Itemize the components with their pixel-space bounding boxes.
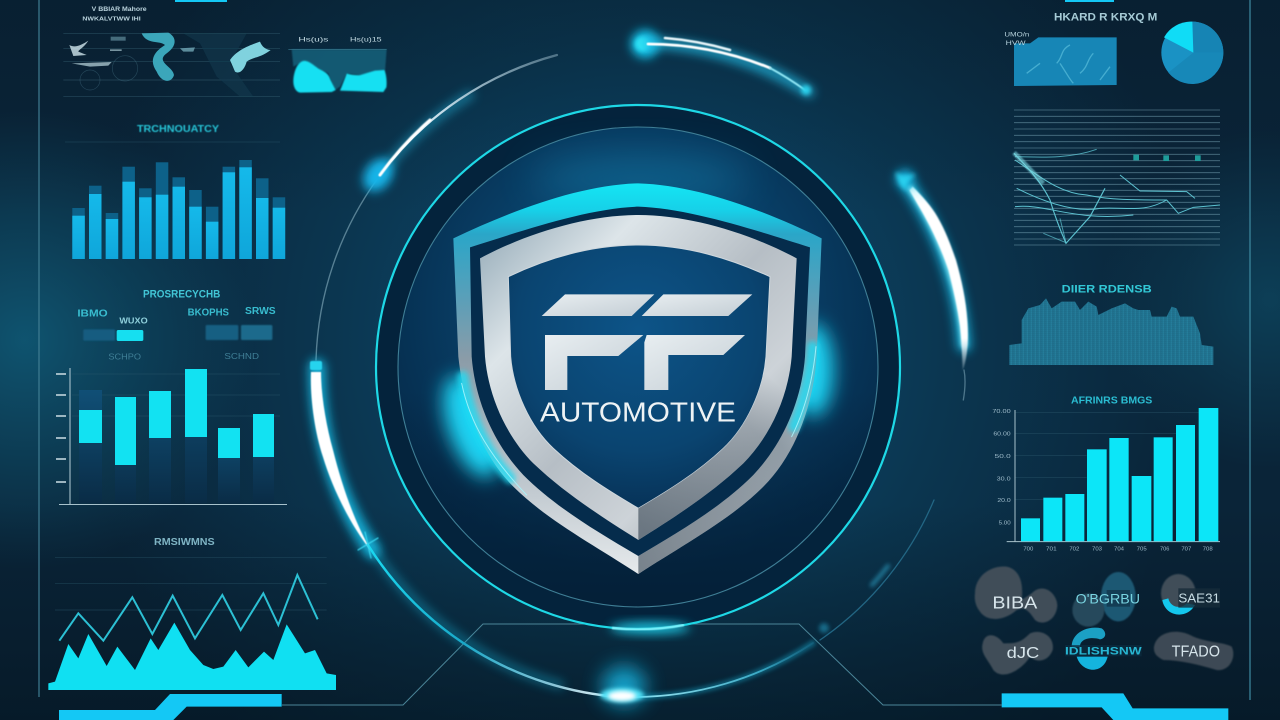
blob: bottom middle	[1065, 628, 1143, 670]
blob: top middle	[1072, 572, 1140, 627]
shield lower right shade	[638, 357, 817, 574]
shield rim light left	[462, 377, 527, 495]
logo: wordmark: AUTOMOTIVE	[540, 397, 736, 428]
heading: DIIER RDENSB	[1062, 283, 1152, 295]
axis labels: 703	[1092, 547, 1102, 553]
cyan ring	[376, 105, 900, 629]
heading: RMSIWMNS	[154, 537, 215, 548]
axis labels: 60.00	[993, 431, 1011, 437]
shield rim light right	[792, 347, 816, 437]
blob: bottom right	[1154, 632, 1233, 670]
panel: bar chart bottom right	[992, 396, 1220, 553]
gauge shapes	[288, 49, 387, 93]
blob: bottom left: dJC	[1007, 645, 1039, 662]
panel: labelled blobs bottom right	[975, 567, 1233, 675]
heading: AFRINRS BMGS	[1071, 396, 1153, 407]
shield groove	[470, 207, 810, 556]
base panel: trapezoid outline	[282, 624, 1002, 705]
labels: IBMO	[77, 309, 108, 320]
blob: top middle: O'BGRBU	[1076, 590, 1140, 606]
accent bar bottom left	[59, 694, 282, 720]
stacked bars	[72, 160, 285, 259]
accent bar bottom right	[1002, 693, 1228, 720]
labels: BKOPHS	[188, 308, 229, 319]
line series	[59, 575, 318, 641]
shield outer band	[453, 183, 822, 574]
top accent bar left	[175, 0, 227, 2]
blob: bottom middle: IDLISHSNW	[1065, 646, 1143, 658]
heading: PROSRECYCHB	[143, 288, 221, 300]
right frame line	[1249, 0, 1251, 700]
axis labels: 704	[1114, 547, 1124, 553]
logo: FF Automotive shield	[431, 183, 833, 574]
gridlines and axis	[1007, 410, 1220, 542]
marker squares	[1133, 155, 1201, 161]
gauge labels: Hs(u)s	[298, 36, 328, 43]
panel: map and header, top left	[63, 6, 280, 97]
left frame line	[38, 0, 40, 697]
icon: right star flare	[895, 170, 916, 191]
arc: right bright	[909, 187, 968, 400]
bright bars	[79, 369, 274, 465]
gauge labels	[298, 36, 382, 43]
labels: WUXO	[119, 315, 148, 325]
axis labels: 20.0	[997, 498, 1011, 504]
axis labels: 706	[1160, 547, 1169, 553]
heading: HKARD R KRXQ M	[1054, 12, 1157, 24]
panel: cyan gauge, top	[288, 36, 387, 93]
blob: top left: BIBA	[992, 592, 1038, 612]
pie chart	[1161, 22, 1223, 84]
world map	[63, 33, 280, 97]
axis labels: 30.0	[997, 476, 1011, 482]
sub labels: SCHND	[224, 351, 259, 361]
glow above shield	[530, 156, 750, 200]
glow on ring bottom	[610, 622, 690, 634]
panel: histogram right	[1009, 283, 1213, 365]
axis labels: 705	[1137, 547, 1147, 553]
axis labels: 701	[1046, 547, 1057, 553]
arc: bottom flare	[600, 666, 646, 706]
orbit ring arcs	[310, 30, 968, 706]
sub labels	[108, 351, 259, 361]
area series	[48, 623, 336, 690]
shield point facet	[638, 357, 792, 540]
axis labels: 702	[1069, 547, 1079, 553]
gridlines	[1014, 110, 1220, 245]
bars	[1021, 408, 1218, 541]
arc: thin left connector	[316, 178, 378, 360]
header text	[82, 6, 147, 23]
inner disc	[398, 127, 878, 607]
dark bar bases	[79, 369, 274, 503]
shield outside glow	[431, 323, 833, 485]
heading: TRCHNOUATCY	[137, 124, 219, 135]
panel: floating bar chart	[56, 368, 287, 505]
arc: left bright	[310, 361, 620, 697]
gauge labels: Hs(u)15	[350, 36, 382, 43]
trend curves	[1014, 149, 1220, 243]
blob: top left	[975, 567, 1057, 623]
thin inner ring	[398, 127, 878, 607]
axis labels: 700	[1023, 547, 1033, 553]
gridlines and axis	[56, 368, 287, 505]
header text: NWKALVTWW IHI	[82, 17, 141, 23]
blob: top right: SAE31	[1178, 591, 1220, 606]
panel: technology bar chart	[65, 124, 285, 259]
labels	[77, 306, 276, 325]
central ring group	[376, 105, 900, 634]
blob: bottom right: TFADO	[1172, 644, 1220, 661]
heat map	[1004, 33, 1117, 86]
header text: V BBIAR Mahore	[92, 6, 147, 13]
axis labels: 708	[1203, 547, 1213, 553]
heat map: UMO/n	[1004, 33, 1029, 39]
panel: line chart top right	[1014, 110, 1220, 245]
blob: top right	[1161, 574, 1220, 615]
arc: bottom right	[630, 500, 934, 697]
shield silver band	[480, 215, 797, 540]
panel: progress labels and pills	[77, 288, 276, 361]
axis labels: 50.0	[995, 454, 1011, 460]
arc: top left	[357, 55, 557, 197]
top accent bar right	[1065, 0, 1114, 2]
labels: SRWS	[245, 306, 276, 317]
sub labels: SCHPO	[108, 351, 141, 361]
panel: area and line chart	[48, 537, 336, 690]
shield inner panel	[508, 245, 770, 508]
logo: FF mark	[542, 294, 752, 390]
axis labels: 70.00	[992, 409, 1011, 415]
blob: bottom left	[982, 632, 1053, 675]
histogram	[1009, 298, 1213, 365]
axis labels	[992, 409, 1213, 553]
arc: top comet	[631, 30, 811, 95]
axis labels: 5.00	[999, 521, 1011, 527]
pills	[83, 325, 272, 341]
axis labels: 707	[1181, 547, 1191, 553]
ring bottom highlight	[612, 625, 684, 629]
dark ring disc	[376, 105, 900, 629]
heat map: HVW	[1006, 41, 1026, 47]
panel: top right map and pie	[1004, 12, 1223, 86]
